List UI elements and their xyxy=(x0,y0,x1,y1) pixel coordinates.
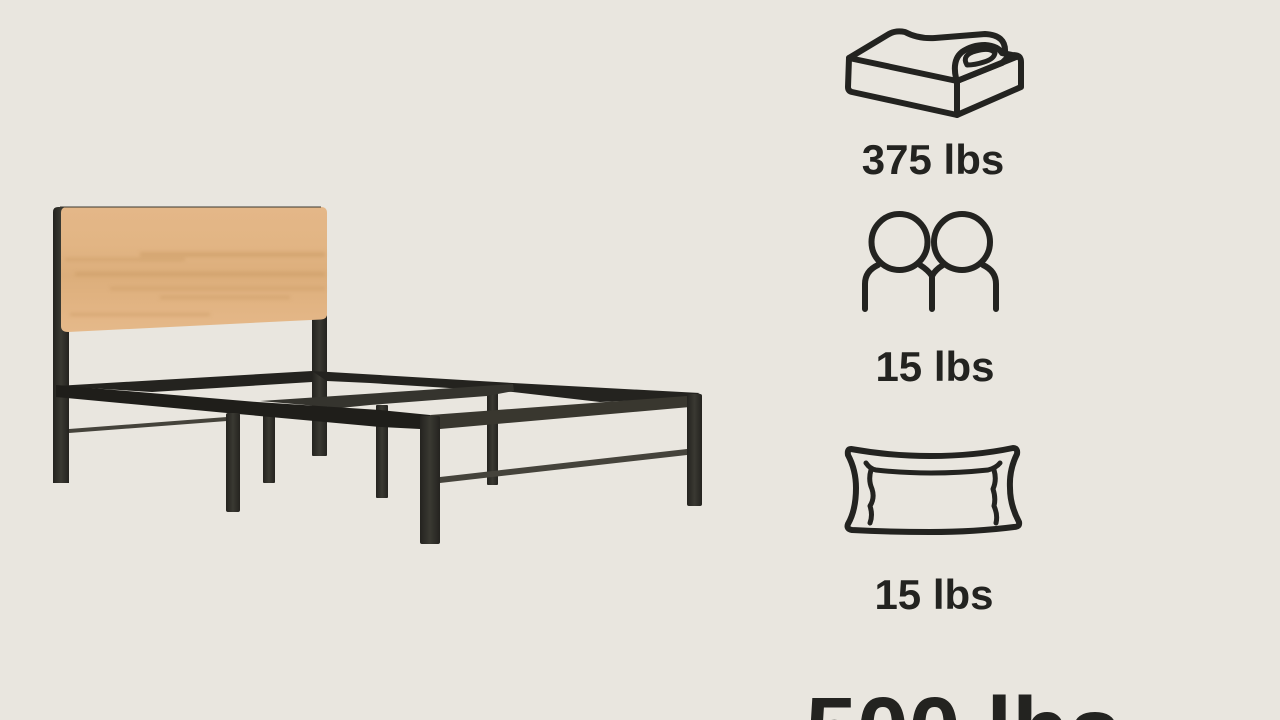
rear and far side rails xyxy=(56,371,700,402)
near side rail xyxy=(56,385,440,429)
front legs xyxy=(226,394,702,544)
wooden headboard panel xyxy=(60,207,327,332)
rear legs and posts xyxy=(53,207,498,498)
label: blanket weight: 375 lbs xyxy=(862,136,1004,183)
centre cross rail xyxy=(260,384,514,408)
icon: pillow xyxy=(848,448,1019,532)
thin lower side rails xyxy=(69,417,687,483)
illustration: bed frame with wooden headboard xyxy=(53,207,702,544)
front rail xyxy=(430,396,690,429)
label: people weight: 15 lbs xyxy=(875,343,995,390)
icon: two people xyxy=(865,214,996,309)
icon: folded blanket xyxy=(848,31,1021,115)
label: pillow weight: 15 lbs xyxy=(874,571,994,618)
